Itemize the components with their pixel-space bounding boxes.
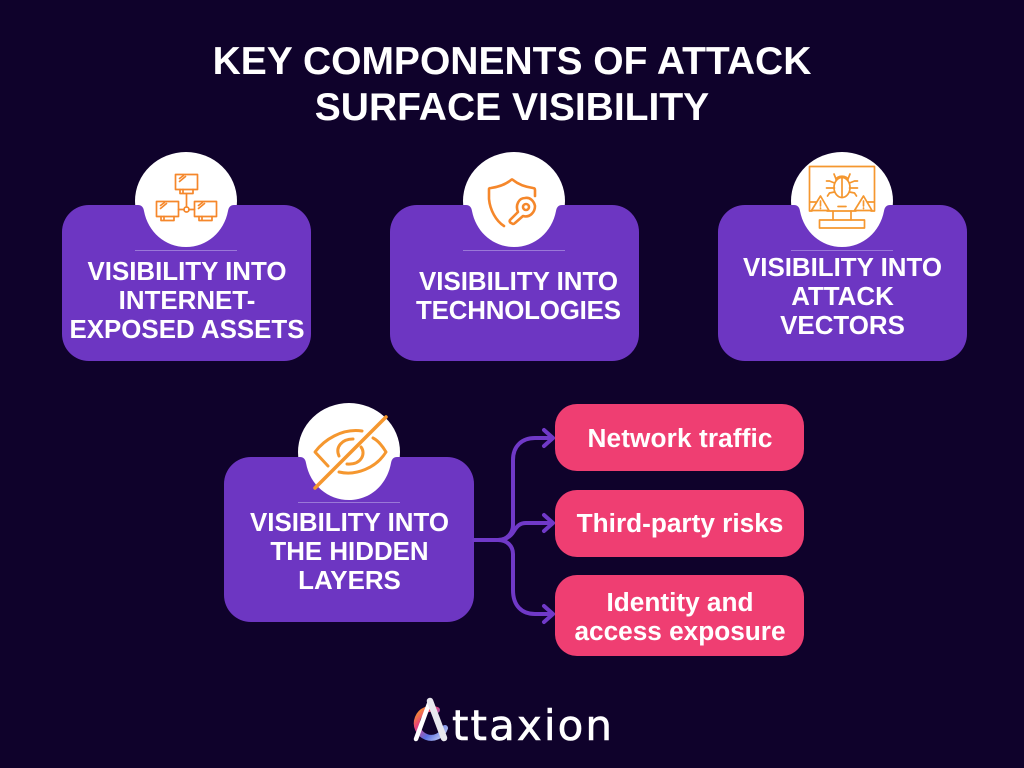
icon: shield and key: [489, 180, 535, 226]
label: INTERNET-: [119, 287, 255, 315]
title: [213, 40, 811, 129]
label: [416, 268, 621, 325]
box: third-party risks: Third-party risks: [577, 508, 783, 538]
label: [743, 254, 942, 340]
label: VISIBILITY INTO: [87, 258, 287, 286]
label: EXPOSED ASSETS: [69, 316, 305, 344]
arrows: hidden layers to details: [474, 430, 553, 622]
label: THE HIDDEN: [270, 538, 429, 566]
box: identity and access exposure: [555, 575, 804, 656]
panel: hidden layers: [224, 403, 474, 622]
panel: technologies: [390, 152, 639, 361]
box: identity and access exposure: Identity and: [607, 587, 753, 617]
label: VECTORS: [780, 312, 905, 340]
label: VISIBILITY INTO: [743, 254, 942, 282]
label: [69, 258, 305, 344]
label: VISIBILITY INTO: [250, 509, 449, 537]
box: network traffic: [555, 404, 804, 471]
logo: Attaxion: ttaxion: [452, 701, 612, 750]
box: third-party risks: [555, 490, 804, 557]
icon: crossed-out eye: [315, 417, 386, 488]
label: ATTACK: [791, 283, 894, 311]
title: KEY COMPONENTS OF ATTACK: [213, 40, 811, 83]
box: network traffic: Network traffic: [588, 423, 772, 453]
icon: monitor with bug and warnings: [810, 166, 874, 228]
label: TECHNOLOGIES: [416, 297, 621, 325]
label: VISIBILITY INTO: [419, 268, 618, 296]
label: LAYERS: [298, 567, 401, 595]
panel: internet-exposed assets: [62, 152, 311, 361]
title: SURFACE VISIBILITY: [315, 86, 709, 129]
panel: attack vectors: [718, 152, 967, 361]
icon: networked computers: [156, 174, 216, 220]
label: [250, 509, 449, 595]
box: identity and access exposure: access exposure: [574, 616, 786, 646]
logo mark: A: [416, 701, 445, 739]
